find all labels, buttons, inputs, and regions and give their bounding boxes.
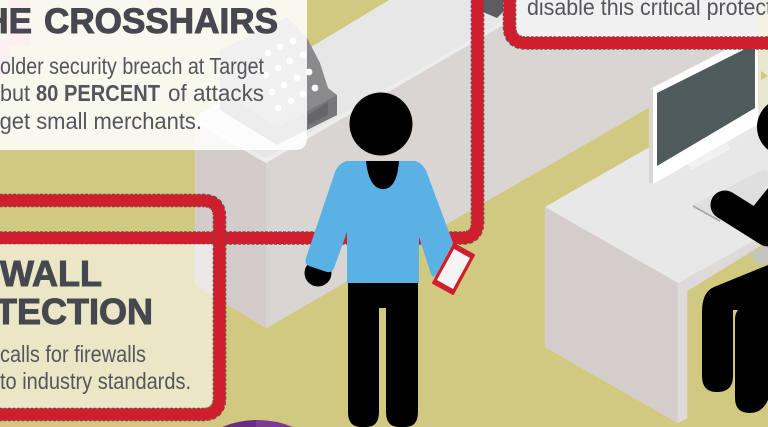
body text: crosshairs: but — [0, 80, 31, 106]
body text: crosshairs — [0, 53, 265, 134]
keyboard — [693, 170, 768, 222]
body text: firewall: calls for firewalls — [0, 341, 146, 367]
head — [350, 92, 412, 156]
body text: crosshairs: older security breach at Target — [0, 53, 265, 79]
standing person's left hand — [304, 260, 332, 286]
desk — [545, 79, 768, 423]
neck — [366, 161, 399, 189]
monitor — [649, 44, 758, 184]
seated person — [702, 98, 768, 413]
icon: cash register — [220, 17, 337, 145]
body text: crosshairs: of attacks — [168, 80, 264, 106]
icon: smartphone — [433, 244, 474, 294]
heading: firewall protection: WALL — [0, 253, 102, 294]
shirt — [305, 161, 453, 283]
connector line: red route — [0, 0, 478, 238]
panel: disable protection — [510, 0, 768, 43]
body text: firewall — [0, 341, 191, 394]
pale strip right of monitor — [758, 49, 768, 109]
legs — [348, 280, 418, 427]
service counter — [195, 0, 768, 328]
body text: firewall: to industry standards. — [0, 368, 191, 394]
register block behind right panel — [483, 0, 503, 18]
panel: the crosshairs — [0, 0, 307, 150]
faint figure behind panel — [0, 0, 160, 76]
standing person — [305, 92, 474, 427]
panel: firewall protection — [0, 200, 220, 414]
heading: the crosshairs: CROSSHAIRS — [44, 2, 278, 41]
body text: crosshairs: 80 PERCENT — [36, 80, 160, 106]
purple circle — [222, 420, 293, 427]
heading: firewall protection — [0, 253, 153, 332]
